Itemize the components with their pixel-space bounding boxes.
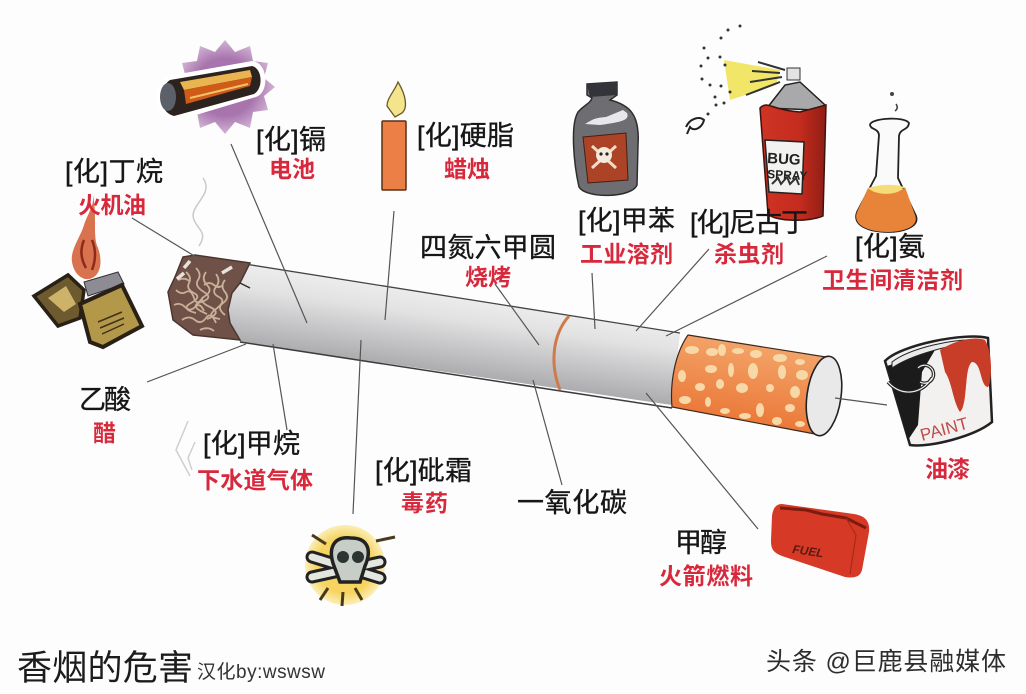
- leader lines: [132, 144, 887, 529]
- icon: poison bottle: [573, 82, 638, 195]
- icon: flask: [856, 92, 917, 232]
- icon: fuel can: [771, 504, 869, 577]
- label: hexamine: 四氮六甲圆: [420, 233, 556, 263]
- label: cadmium: 电池: [269, 156, 315, 182]
- label: stearic acid: [417, 121, 514, 182]
- label: stearic acid: [化]硬脂: [417, 121, 514, 151]
- label: cadmium: [化]镉: [256, 125, 326, 155]
- vapour: [176, 421, 195, 476]
- label: carbon monoxide: 一氧化碳: [517, 488, 627, 518]
- label: ammonia: [822, 232, 963, 293]
- label: stearic acid: 蜡烛: [444, 156, 490, 182]
- cigarette filter: [672, 335, 826, 434]
- label: acetic acid: 醋: [93, 420, 116, 446]
- icon: bug spray can: BUG: [767, 150, 801, 169]
- icon: paint can: PAINT: [918, 414, 970, 445]
- icon: skull and crossbones: [305, 525, 395, 606]
- label: arsenic: [化]砒霜: [375, 456, 472, 486]
- label: acetic acid: 乙酸: [79, 385, 131, 415]
- label: butane: [化]丁烷: [65, 157, 163, 187]
- label: methanol: 甲醇: [675, 528, 727, 558]
- label: butane: 火机油: [78, 192, 146, 218]
- icon: bug spray can: [686, 24, 826, 220]
- label: methane: [化]甲烷: [203, 429, 300, 459]
- title: 香烟的危害: [17, 649, 193, 688]
- cigarette: [168, 255, 846, 438]
- label: hexamine: [420, 233, 556, 290]
- label: butane: [65, 157, 163, 218]
- icon: paint can: [885, 337, 992, 445]
- icon: lighter with flame: [34, 190, 142, 347]
- label: ammonia: [化]氨: [855, 232, 925, 262]
- icon: fuel can: FUEL: [792, 542, 825, 560]
- label: hexamine: 烧烤: [465, 264, 511, 290]
- label: methane: [197, 429, 313, 493]
- label: acetic acid: [79, 385, 131, 446]
- label: nicotine: 杀虫剂: [714, 241, 784, 267]
- label: paint: 油漆: [925, 456, 970, 482]
- orange ring mark: [554, 316, 569, 390]
- label: toluene: [化]甲苯: [578, 206, 675, 236]
- credit: 汉化by:wswsw: [197, 661, 325, 683]
- cigarette mouth end: [802, 354, 846, 438]
- icon: battery: [157, 40, 275, 134]
- label: cadmium: [256, 125, 326, 182]
- burnt tobacco end: [168, 255, 250, 340]
- label: nicotine: [690, 208, 808, 267]
- label: toluene: [578, 206, 675, 267]
- smoke: [193, 178, 206, 246]
- watermark: 头条 @巨鹿县融媒体: [766, 648, 1006, 676]
- label: nicotine: [化]尼古丁: [690, 208, 808, 238]
- label: ammonia: 卫生间清洁剂: [822, 267, 963, 293]
- label: arsenic: [375, 456, 472, 516]
- label: methanol: 火箭燃料: [659, 563, 753, 589]
- icon: candle: [382, 82, 406, 190]
- label: methanol: [659, 528, 753, 589]
- label: toluene: 工业溶剂: [580, 241, 673, 267]
- cigarette paper body: [226, 262, 680, 405]
- label: methane: 下水道气体: [197, 467, 313, 493]
- icon: bug spray can: SPRAY: [767, 167, 808, 183]
- label: arsenic: 毒药: [401, 490, 448, 516]
